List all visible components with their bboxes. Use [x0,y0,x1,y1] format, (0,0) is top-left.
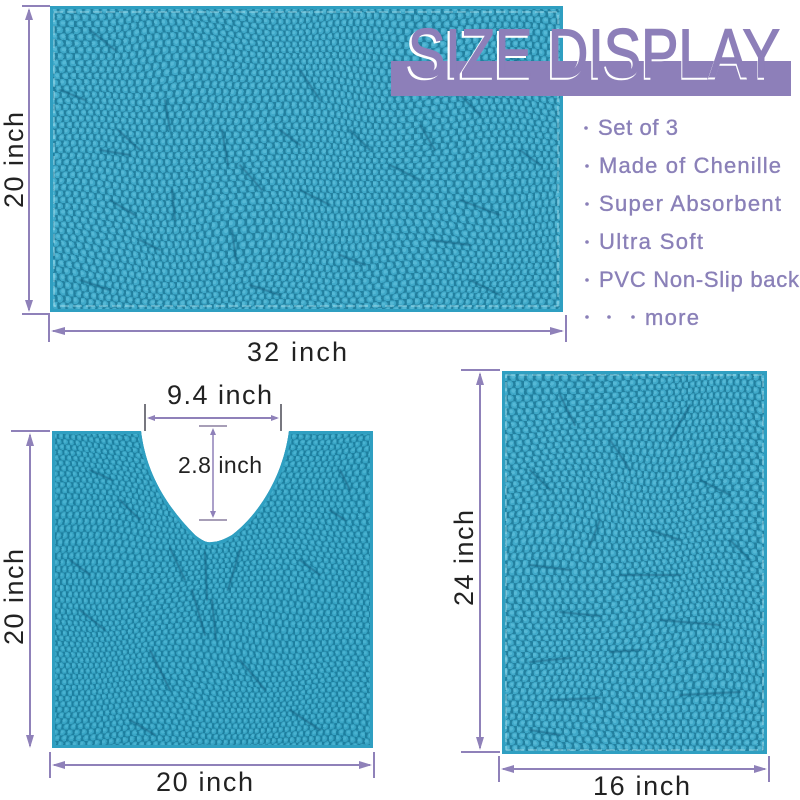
dimension: notch depth [178,426,262,520]
feature list [584,115,800,330]
dimension: notch depth: 2.8 inch [178,452,262,478]
dimension: tall mat height [449,370,500,752]
feature list: PVC Non-Slip back [599,267,800,292]
panel: U-shaped contour mat [52,431,373,748]
dimension: notch width [145,380,281,431]
feature list: Set of 3 [598,115,678,140]
dimension: tall mat height: 24 inch [449,510,479,606]
dimension: contour mat width: 20 inch [156,767,253,797]
feature list: Ultra Soft [599,229,703,254]
dimension: notch width: 9.4 inch [167,380,272,410]
feature list: more [645,305,699,330]
dimension: tall mat width [499,756,769,800]
panel: large rectangular mat [50,6,563,312]
dimension: large mat width: 32 inch [247,337,347,367]
dimension: large mat width [49,315,566,367]
panel: tall rectangular mat [502,371,767,754]
dimension: contour mat width [50,752,374,797]
dimension: large mat height [0,6,50,314]
feature list: Made of Chenille [599,153,781,178]
dimension: contour mat height [0,431,50,748]
feature list: Super Absorbent [599,191,781,216]
